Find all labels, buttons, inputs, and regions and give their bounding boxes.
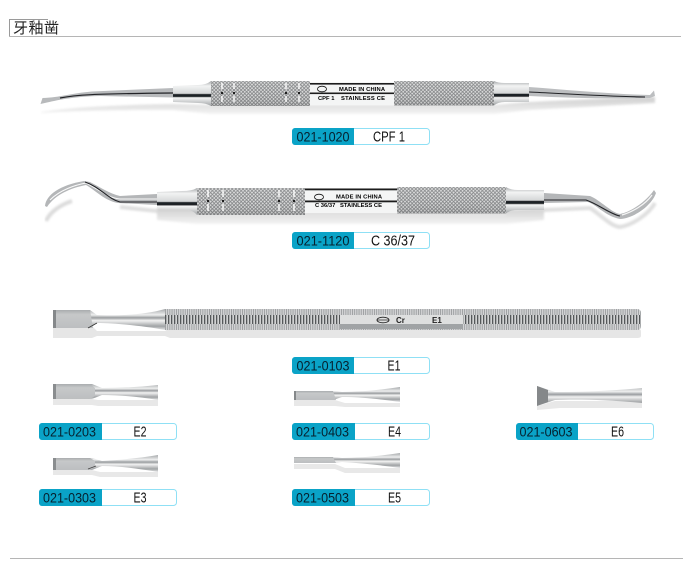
label: 021-0303 E3: 021-0303 <box>43 490 96 506</box>
label: 021-1020 CPF 1: CPF 1 <box>373 130 405 146</box>
label: 021-0503 E5: E5 <box>388 490 401 506</box>
label: 021-0403 E4 <box>292 423 430 440</box>
label: 021-0603 E6: 021-0603 <box>520 424 572 440</box>
instrument: E1: Cr <box>396 316 405 325</box>
instrument: CPF 1 <box>40 81 655 114</box>
label: 021-0603 E6: E6 <box>611 424 624 440</box>
instrument: E4 <box>294 387 400 407</box>
label: 021-0403 E4: E4 <box>388 424 401 440</box>
label: 021-0303 E3: E3 <box>134 490 146 506</box>
label: 021-0603 E6 <box>516 423 654 440</box>
label: 021-1120 C 36/37: 021-1120 <box>296 234 350 248</box>
instrument: E1 <box>53 309 641 338</box>
label: 021-1020 CPF 1 <box>292 128 430 146</box>
label: 021-0103 E1: 021-0103 <box>296 358 350 374</box>
label: 021-0503 E5 <box>292 489 430 506</box>
instrument: C 36/37: C 36/37 <box>315 203 335 209</box>
label: 021-1020 CPF 1: 021-1020 <box>296 130 350 144</box>
instrument: E1: E1 <box>432 316 442 325</box>
instrument: E6 <box>537 386 642 410</box>
label: 021-0203 E2: 021-0203 <box>43 424 96 440</box>
instrument: E3 <box>53 455 158 477</box>
instrument: CPF 1: CPF 1 <box>318 96 335 102</box>
instrument: C 36/37: STAINLESS CE <box>340 203 382 209</box>
label: 021-0403 E4: 021-0403 <box>296 424 349 440</box>
label: 021-0203 E2: E2 <box>134 424 146 440</box>
label: 021-0303 E3 <box>39 489 176 506</box>
instrument: E5 <box>294 453 400 473</box>
instrument: C 36/37 <box>45 181 656 227</box>
label: 021-0103 E1: E1 <box>388 358 400 374</box>
label: 021-1120 C 36/37: C 36/37 <box>371 234 415 250</box>
instrument: E2 <box>53 384 158 406</box>
instrument: CPF 1: STAINLESS CE <box>341 96 385 102</box>
instrument: CPF 1: MADE IN CHINA <box>339 87 386 93</box>
title <box>9 20 681 37</box>
label: 021-0503 E5: 021-0503 <box>296 490 349 506</box>
label: 021-1120 C 36/37 <box>292 232 430 250</box>
instrument: C 36/37: MADE IN CHINA <box>336 194 383 200</box>
label: 021-0103 E1 <box>292 357 430 374</box>
label: 021-0203 E2 <box>39 423 176 440</box>
title: 牙釉凿 <box>13 20 60 37</box>
